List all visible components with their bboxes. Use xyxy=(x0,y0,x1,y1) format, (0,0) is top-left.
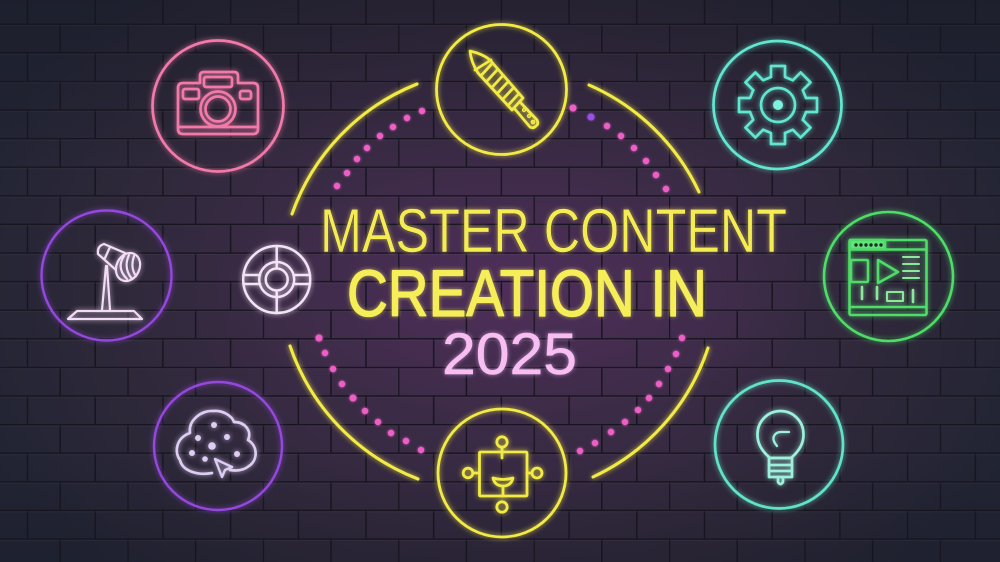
large yellow ring segments xyxy=(290,84,708,479)
icon: spotlight lamp xyxy=(42,210,172,340)
icon: camera xyxy=(152,40,284,172)
icon: light bulb xyxy=(715,380,843,508)
icon: workflow block in yellow circle xyxy=(438,409,566,537)
title line: year: 2025 xyxy=(442,322,577,387)
icon: pen nib in yellow circle xyxy=(436,24,566,154)
pink dotted ring xyxy=(316,104,685,454)
icon: video editor window xyxy=(824,212,953,341)
icon: idea cloud with cursor xyxy=(154,382,282,510)
title xyxy=(320,197,787,387)
title line: master content: MASTER CONTENT xyxy=(320,197,787,266)
icon: target reticle xyxy=(243,246,310,313)
icon: gear xyxy=(714,41,842,169)
title line: creation in: CREATION IN xyxy=(347,256,707,330)
